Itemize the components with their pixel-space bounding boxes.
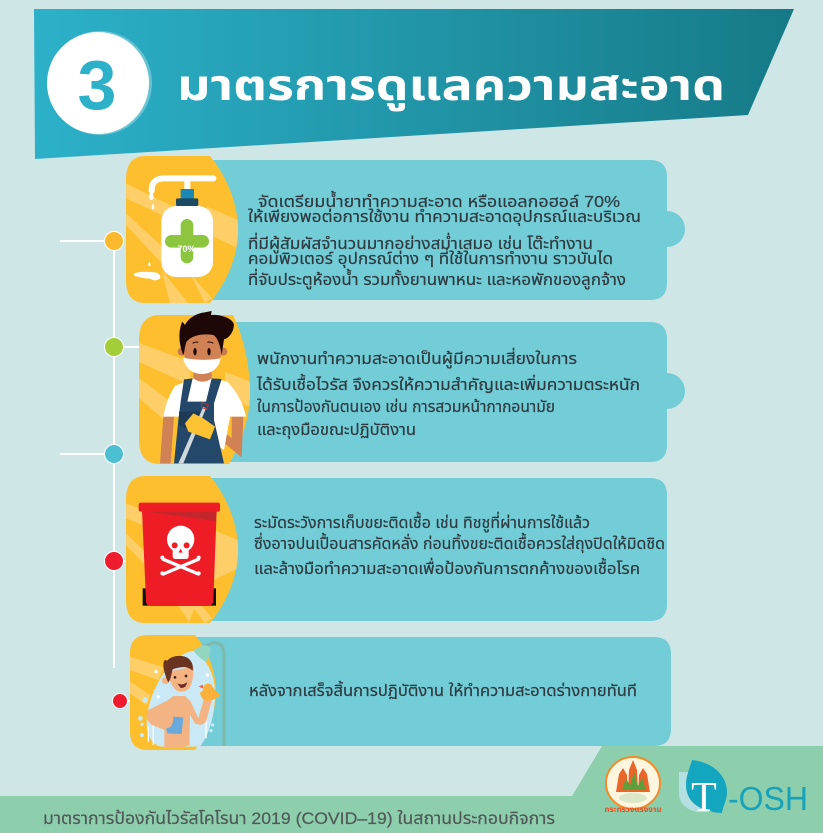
panel: cleaner worker [135,310,685,470]
text block 3 [254,511,665,578]
timeline dot red [104,552,124,570]
footer [0,746,823,833]
text block 1: ที่จับประตูห้องน้ำ รวมทั้งยานพาหนะ และหอพักของลูกจ้าง [248,268,626,289]
icon: sanitizer bottle [126,156,238,303]
logo: T-OSH [679,760,808,821]
text block 1 [248,190,641,289]
logo: T-OSH: -OSH [728,780,808,817]
text block 3: ระมัดระวังการเก็บขยะติดเชื้อ เช่น ทิชชูที่ผ่านการใช้แล้ว [254,511,590,532]
header banner [34,9,794,159]
panel: shower [125,630,671,755]
timeline dot cyan [104,444,124,464]
text block 2: และถุงมือขณะปฏิบัติงาน [257,422,416,439]
icon: man showering [130,635,226,750]
title: มาตรการดูแลความสะอาด [177,62,725,111]
logo: T-OSH: T [691,775,717,821]
timeline dot red small [112,694,128,708]
panel: sanitizer [120,150,685,310]
footer text: มาตราการป้องกันไวรัสโคโรนา 2019 (COVID–19) ในสถานประกอบกิจการ [43,809,555,828]
number badge [47,31,152,135]
text block 1: ที่มีผู้สัมผัสจำนวนมากอย่างสม่ำเสมอ เช่น โต๊ะทำงาน [248,232,593,253]
number badge: 3 [78,46,116,124]
text block 3: และล้างมือทำความสะอาดเพื่อป้องกันการตกค้างของเชื้อโรค [254,557,640,578]
logo: ministry seal [604,757,662,814]
text block 2: ได้รับเชื้อไวรัส จึงควรให้ความสำคัญและเพิ่มความตระหนัก [256,373,640,394]
timeline [60,232,139,708]
text block 1: จัดเตรียมน้ำยาทำความสะอาด หรือแอลกอฮอล์ 70% [258,190,620,211]
icon: red waste bin [126,476,238,623]
logo: ministry seal: กระทรวงแรงงาน [604,805,662,814]
text block 1: ให้เพียงพอต่อการใช้งาน ทำความสะอาดอุปกรณ์และบริเวณ [248,208,641,226]
icon: masked worker [139,311,250,464]
timeline dot yellow [104,232,124,250]
timeline dot green [104,338,124,356]
text block 2 [256,347,640,439]
text block 1: คอมพิวเตอร์ อุปกรณ์ต่าง ๆ ที่ใช้ในการทำงาน ราวบันได [248,247,613,268]
text block 2: ในการป้องกันตนเอง เช่น การสวมหน้ากากอนามัย [257,398,555,416]
text block 2: พนักงานทำความสะอาดเป็นผู้มีความเสี่ยงในการ [257,347,577,368]
text block 3: ซึ่งอาจปนเปื้อนสารคัดหลั่ง ก่อนทิ้งขยะติดเชื้อควรใส่ถุงปิดให้มิดชิด [254,532,665,553]
text block 4: หลังจากเสร็จสิ้นการปฏิบัติงาน ให้ทำความสะอาดร่างกายทันที [249,680,637,700]
panel: infectious waste [120,470,667,630]
bottle label: 70% [177,244,196,254]
